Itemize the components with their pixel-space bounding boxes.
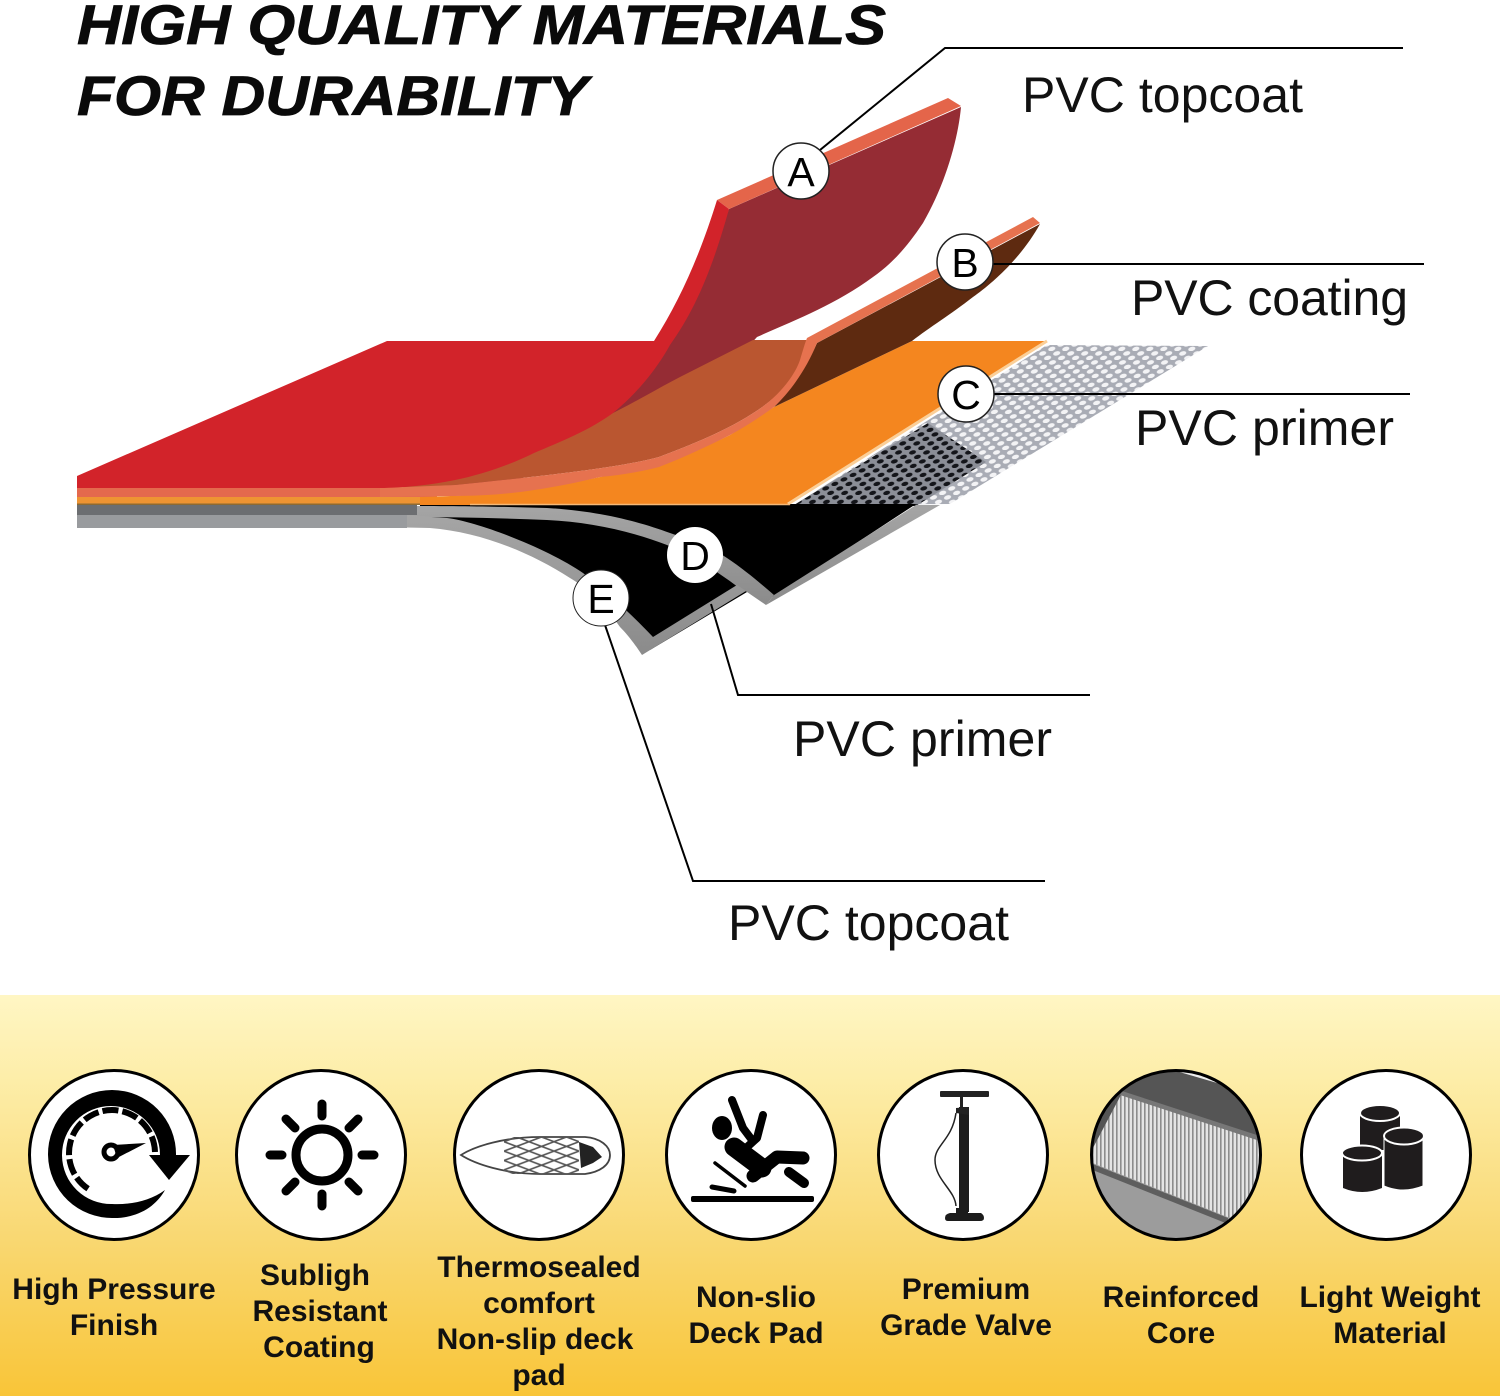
label: PVC topcoat A: PVC topcoat xyxy=(1022,67,1303,123)
caption: Thermosealed comfort: Non-slip deck xyxy=(437,1323,634,1356)
badge A xyxy=(773,143,829,199)
label: PVC topcoat E: PVC topcoat xyxy=(728,895,1009,951)
badge B xyxy=(937,234,993,290)
badge E xyxy=(573,570,629,626)
caption: Non-slio Deck Pad: Deck Pad xyxy=(688,1317,824,1350)
caption: Light Weight Material: Material xyxy=(1333,1317,1447,1350)
orange layer xyxy=(420,341,1047,505)
badge C xyxy=(938,366,994,422)
sheet A underside xyxy=(420,107,961,488)
caption: Thermosealed comfort: comfort xyxy=(483,1287,595,1320)
caption: Non-slio Deck Pad: Non-slio xyxy=(696,1281,816,1314)
icon: floor pump xyxy=(878,1070,1048,1240)
caption: Subligh Resistant Coating: Coating xyxy=(263,1331,375,1364)
label: PVC primer D: PVC primer xyxy=(793,711,1052,767)
fabric mesh layer xyxy=(794,345,1208,506)
badge D: D xyxy=(680,533,710,579)
title xyxy=(77,0,886,127)
sheet B underside xyxy=(774,224,1040,407)
leader lines xyxy=(605,48,1424,881)
sheet B edge xyxy=(380,217,1040,497)
caption: Reinforced Core: Core xyxy=(1147,1317,1215,1350)
sheet A edge xyxy=(717,98,961,209)
label: PVC primer C: PVC primer xyxy=(1135,400,1394,456)
caption: Light Weight Material: Light Weight xyxy=(1299,1281,1481,1314)
feature band background xyxy=(0,995,1500,1396)
caption: Premium Grade Valve: Premium xyxy=(902,1273,1030,1306)
left edge stack xyxy=(77,476,577,528)
label: PVC coating B: PVC coating xyxy=(1131,270,1408,326)
caption: Premium Grade Valve: Grade Valve xyxy=(880,1309,1052,1342)
caption: Thermosealed comfort: Thermosealed xyxy=(437,1251,641,1284)
icon: sun xyxy=(236,1070,406,1240)
icon: reinforced core xyxy=(1085,1070,1262,1242)
sheet B face xyxy=(400,340,815,488)
title: FOR DURABILITY xyxy=(77,64,593,127)
icon: cylinders xyxy=(1302,1070,1470,1240)
caption: High Pressure Finish: High Pressure xyxy=(12,1273,216,1306)
icon: pressure gauge xyxy=(30,1070,198,1240)
caption: Reinforced Core: Reinforced xyxy=(1103,1281,1259,1314)
caption: Thermosealed comfort: pad xyxy=(512,1359,566,1392)
caption: Subligh Resistant Coating: Subligh xyxy=(260,1259,370,1292)
badge C: C xyxy=(951,372,981,418)
red top sheet xyxy=(77,200,729,488)
black lower layer xyxy=(420,504,916,650)
lower gray edges xyxy=(380,505,940,655)
badge B: B xyxy=(951,240,979,286)
icon: slipping person xyxy=(666,1070,836,1240)
icon: board with deck pad xyxy=(454,1070,624,1240)
layered material diagram xyxy=(77,98,1208,655)
caption: Subligh Resistant Coating: Resistant xyxy=(252,1295,388,1328)
badge A: A xyxy=(787,149,815,195)
badge D xyxy=(667,527,723,583)
badge E: E xyxy=(587,576,615,622)
caption: High Pressure Finish: Finish xyxy=(70,1309,158,1342)
